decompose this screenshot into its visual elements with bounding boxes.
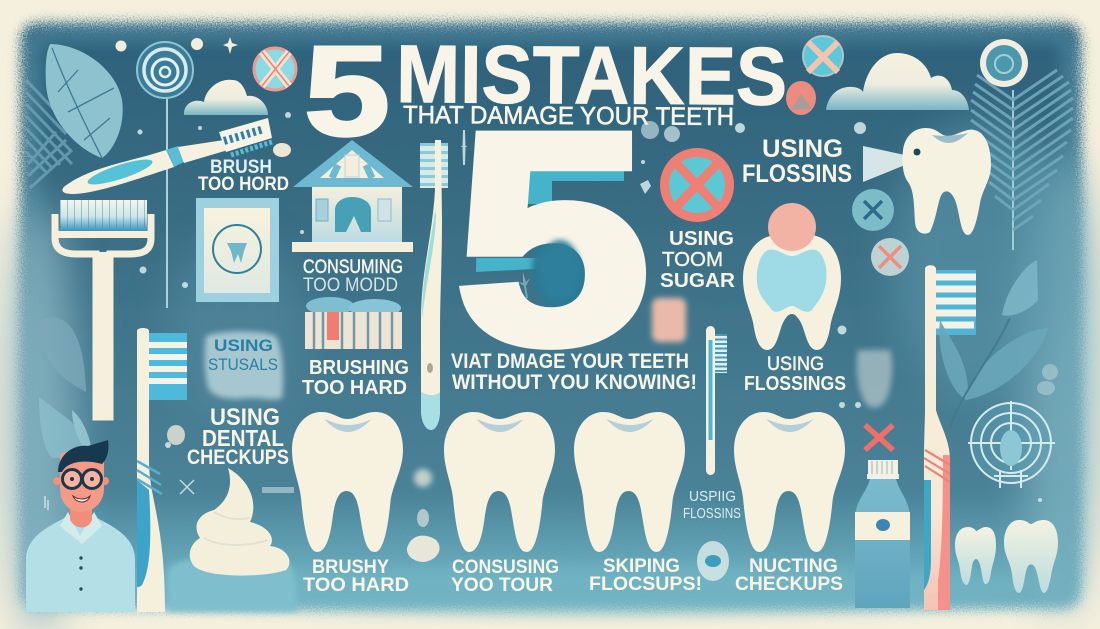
toothpaste swirl <box>167 468 297 612</box>
label: using dental checkups: USING <box>210 404 280 431</box>
label: consusing yoo tour <box>451 557 559 596</box>
label: using flossins <box>742 135 852 188</box>
label: consuming too modd: CONSUMING <box>303 257 403 278</box>
label: skiping flocsups: FLOCSUPS! <box>589 574 702 595</box>
right toothbrush <box>924 265 976 610</box>
label: brushing too hard: BRUSHING <box>309 357 409 379</box>
target lollipop left <box>137 42 193 308</box>
tooth 2 <box>444 412 555 552</box>
toothbrush top left <box>62 118 272 194</box>
label: using toom sugar: USING <box>669 228 734 250</box>
small faded objects between teeth <box>407 469 440 562</box>
label: what damage without you knowing: VIAT DMAGE YOUR TEETH <box>451 350 689 373</box>
forbidden icon top right <box>803 36 843 76</box>
label: using flossins: FLOSSINS <box>742 160 852 188</box>
label: brushing too hard: TOO HARD <box>302 377 407 399</box>
tooth 4 <box>734 412 845 552</box>
forbidden icon top left <box>254 48 296 90</box>
label: nucting checkups: CHECKUPS <box>735 574 843 595</box>
title mistakes: MISTAKES <box>396 29 788 123</box>
label: skiping flocsups: SKIPING <box>603 556 680 577</box>
label: consuming too modd <box>303 257 403 296</box>
label: using stusals blob: STUSALS <box>208 355 278 374</box>
side decorative blobs right <box>1037 364 1058 395</box>
title number 5: 5 <box>304 20 390 163</box>
right leaves <box>939 260 1048 428</box>
target top right <box>980 39 1028 87</box>
label: using flossings: FLOSSINGS <box>744 373 846 395</box>
label: uspiig flossins <box>683 488 741 522</box>
label: uspiig flossins: FLOSSINS <box>683 505 741 522</box>
subtitle: THAT DAMAGE YOUR TEETH <box>403 101 734 131</box>
small tooth 1 <box>955 527 996 585</box>
label: brushy too hard <box>303 557 409 596</box>
small tooth 2 <box>1004 520 1058 593</box>
salmon blob <box>786 81 816 115</box>
label: using flossings: USING <box>767 354 824 375</box>
small salmon x badge <box>871 238 909 276</box>
radar circle <box>968 401 1055 488</box>
label: skiping flocsups <box>589 556 702 595</box>
small x badge <box>852 189 894 231</box>
red x mark <box>865 425 893 450</box>
label: using toom sugar <box>660 228 736 292</box>
label: nucting checkups: NUCTING <box>749 556 838 577</box>
label: brushy too hard: BRUSHY <box>312 557 389 578</box>
tooth with flare <box>863 128 991 235</box>
label: what damage without you knowing <box>451 350 697 394</box>
roller brush <box>55 200 151 417</box>
label: nucting checkups <box>735 556 843 595</box>
label: using toom sugar: TOOM <box>662 249 723 271</box>
tooth 1 <box>292 412 403 552</box>
label: brush too hord <box>198 157 289 195</box>
label: brushing too hard <box>302 357 409 399</box>
label: brushy too hard: TOO HARD <box>303 575 409 596</box>
left leaf with stripes <box>26 44 123 188</box>
cloud top right <box>826 53 969 110</box>
left mid leaves <box>39 318 92 458</box>
cloud top left <box>184 80 268 115</box>
center tall toothbrush <box>420 140 448 430</box>
label: uspiig flossins: USPIIG <box>689 488 736 505</box>
top decorative dots and sparkles <box>116 37 238 54</box>
big forbidden icon <box>660 148 734 222</box>
faded tooth mid right <box>857 350 892 408</box>
label: using flossins: USING <box>762 135 843 163</box>
big center number 5: 5 <box>455 70 650 406</box>
bottle <box>855 460 910 608</box>
label: using toom sugar: SUGAR <box>660 270 736 292</box>
tooth 3 <box>574 412 685 552</box>
floss disc <box>697 541 729 581</box>
label: using dental checkups: CHECKUPS <box>187 446 289 469</box>
label: what damage without you knowing: WITHOUT YOU KNOWING! <box>452 371 697 394</box>
scattered sparkles <box>45 112 1042 510</box>
label: using dental checkups <box>187 404 289 469</box>
person <box>26 440 135 612</box>
label: using flossings <box>744 354 846 395</box>
label: using dental checkups: DENTAL <box>202 425 284 451</box>
framed tooth picture <box>196 198 279 302</box>
label: consuming too modd: TOO MODD <box>303 275 398 296</box>
dental house <box>292 140 413 252</box>
salmon blob below <box>652 298 686 342</box>
tooth with cavity <box>743 203 841 350</box>
small toothbrush <box>706 326 727 475</box>
label: brush too hord: TOO HORD <box>198 174 289 195</box>
colored teeth row <box>305 297 402 349</box>
fern <box>971 70 1073 250</box>
left toothbrush <box>137 328 187 612</box>
label: brush too hord: BRUSH <box>210 157 272 178</box>
label: using stusals blob <box>205 332 283 399</box>
label: consusing yoo tour: CONSUSING <box>452 557 559 578</box>
label: consusing yoo tour: YOO TOUR <box>451 575 553 596</box>
label: using stusals blob: USING <box>214 336 273 355</box>
blob near label <box>273 143 291 157</box>
